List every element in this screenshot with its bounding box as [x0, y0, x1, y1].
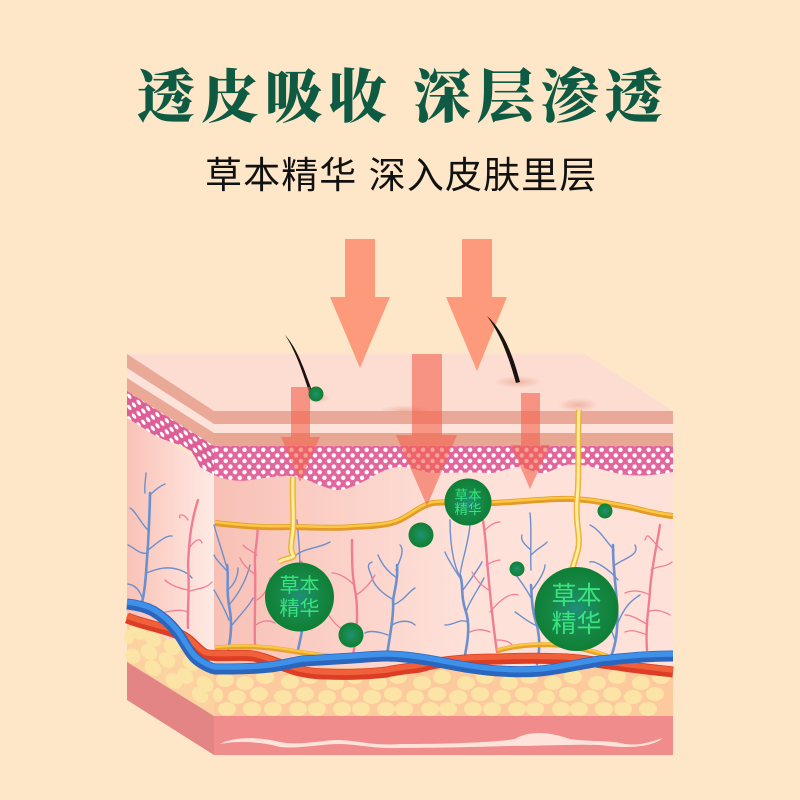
upper nerve fibre [215, 498, 673, 528]
title: 透皮吸收 深层渗透 [137, 65, 669, 130]
front face dotted pink layer [214, 446, 673, 490]
herbal ball: large right: 精华 [551, 610, 602, 638]
right hair [487, 316, 520, 383]
white streak in subcutaneous layer [220, 733, 663, 748]
right arrow [511, 393, 550, 489]
herbal ball: small centre [444, 478, 492, 526]
left hair [285, 335, 312, 392]
left face epidermis bands [127, 354, 214, 446]
front face subcutaneous layer [214, 716, 673, 755]
subtitle: 草本精华 深入皮肤里层 [205, 155, 597, 196]
herbal ball: medium left: 精华 [280, 597, 320, 620]
blue veins [128, 473, 640, 664]
left hair follicle [279, 477, 293, 562]
left arrow [281, 387, 320, 482]
fat cells [122, 621, 670, 716]
herbal ball: small centre: 精华 [454, 502, 482, 517]
left face dotted pink layer [127, 391, 214, 475]
herbal ball: large right: 草本 [551, 582, 602, 610]
translucent arrows through the skin [281, 354, 550, 506]
lower nerve fibres [215, 644, 607, 657]
herbal ball: small centre: 草本 [454, 488, 482, 503]
front face epidermis bands [214, 411, 673, 446]
large arrows above the skin [330, 239, 507, 371]
pink capillaries [165, 500, 672, 655]
top surface of skin [127, 354, 673, 411]
blue vein vessel [127, 602, 673, 672]
small herbal particles [308, 386, 612, 648]
centre arrow [396, 354, 457, 506]
left face subcutaneous layer [127, 662, 214, 755]
right hair follicle [570, 410, 579, 576]
red artery [127, 616, 673, 674]
front face dermis [214, 460, 673, 672]
herbal ball: large right [534, 567, 618, 651]
left face dermis [127, 415, 214, 667]
herbal ball: medium left [265, 562, 334, 632]
skin pores [306, 376, 598, 417]
front face fat layer [214, 668, 673, 716]
herbal ball: medium left: 草本 [280, 574, 320, 597]
left face fat layer [127, 617, 214, 716]
skin cross-section block [122, 354, 673, 755]
